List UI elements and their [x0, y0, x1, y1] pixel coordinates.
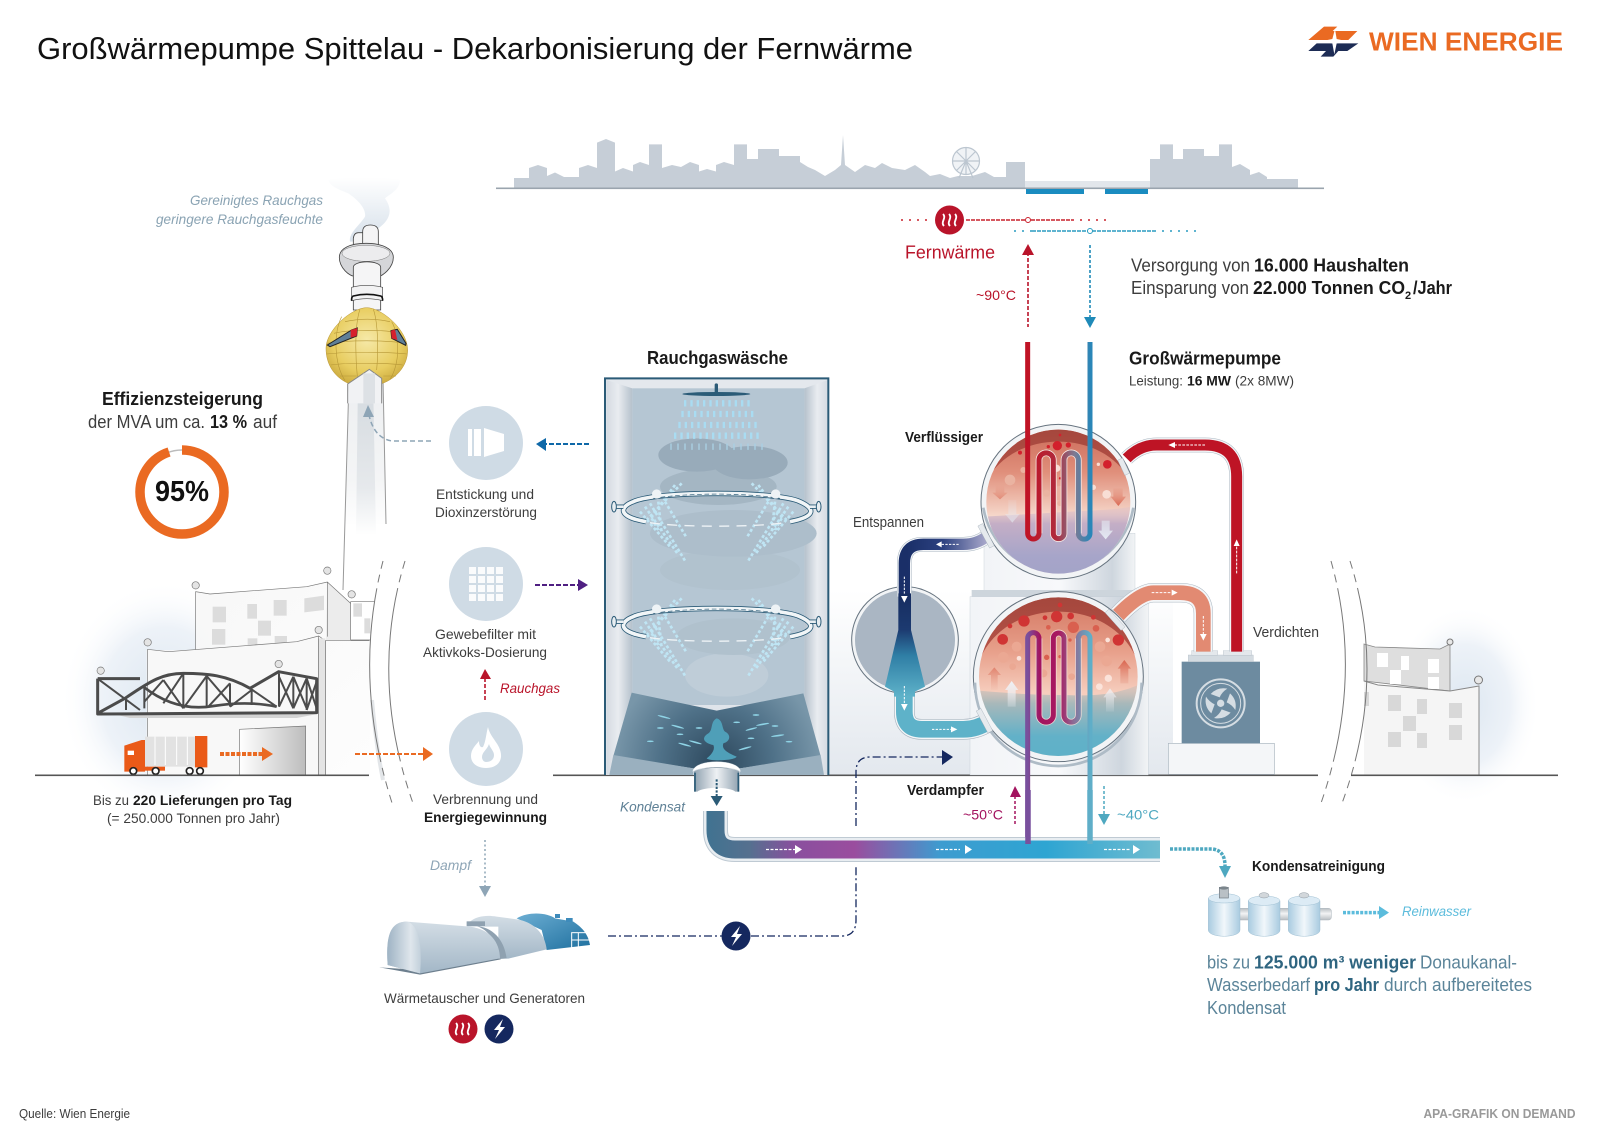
text: water savings: 125.000 m³ weniger	[1254, 952, 1416, 972]
stat: households and CO2: /Jahr	[1413, 278, 1452, 298]
clouds of flue gas	[650, 438, 817, 697]
label: 50 degrees: ~50°C	[963, 806, 1003, 822]
arrow: to condensate cleaning	[1170, 849, 1231, 878]
credit: APA-GRAFIK ON DEMAND	[1424, 1107, 1576, 1121]
heading: Fernwärme: Fernwärme	[905, 242, 995, 262]
label: Dampf: Dampf	[430, 857, 473, 873]
icon: district heat	[935, 206, 964, 234]
labels: heat pump parts: Entspannen	[853, 515, 924, 531]
text: fabric filter: Aktivkoks-Dosierung	[423, 644, 547, 660]
arrow: steam	[479, 840, 491, 897]
arrow: down from evaporator	[1098, 786, 1110, 825]
stat: households and CO2: Versorgung von	[1131, 256, 1250, 276]
Fernwärme network lines	[901, 218, 1196, 234]
panel: incineration plant building	[97, 567, 375, 775]
bridge truss	[98, 672, 317, 714]
icon: power small	[484, 1014, 514, 1044]
arrow: clean water	[1343, 906, 1389, 919]
label: Rauchgas: Rauchgas	[500, 680, 560, 696]
stat: households and CO2: 2	[1405, 290, 1411, 302]
text: denitrification: Dioxinzerstörung	[435, 504, 537, 520]
heading: Kondensatreinigung: Kondensatreinigung	[1252, 859, 1385, 875]
hopper	[609, 693, 824, 775]
title: Großwärmepumpe Spittelau - Dekarbonisierung der Fernwärme	[37, 31, 913, 66]
labels: heat pump parts	[853, 430, 1319, 799]
support blocks	[970, 533, 1148, 775]
arrow: blue from scrubber	[536, 438, 589, 451]
cut marks right	[1320, 561, 1367, 806]
text: deliveries: Bis zu	[93, 792, 129, 808]
heading: Großwärmepumpe: Leistung:	[1129, 372, 1183, 388]
drain funnel	[693, 762, 741, 806]
icon: flame	[449, 712, 523, 786]
label: cleaned flue gas: Gereinigtes Rauchgas	[190, 192, 323, 208]
text: water savings: Kondensat	[1207, 998, 1286, 1018]
text: combustion	[424, 791, 547, 825]
cut marks left	[370, 561, 414, 806]
label: cleaned flue gas	[156, 192, 323, 227]
stat: efficiency: Effizienzsteigerung	[102, 389, 263, 409]
stat: households and CO2: Einsparung von	[1131, 278, 1249, 298]
panel: chimney tower	[326, 177, 408, 590]
heading: Großwärmepumpe: 16 MW	[1187, 372, 1232, 388]
text: combustion: Energiegewinnung	[424, 809, 547, 825]
compressor	[1168, 651, 1274, 774]
arrow: up to evaporator	[1010, 786, 1021, 826]
stat: efficiency	[88, 389, 278, 432]
text: water savings: pro Jahr	[1314, 975, 1379, 995]
text: water savings: durch aufbereitetes	[1384, 975, 1532, 995]
donut chart: 95 percent	[140, 450, 224, 534]
icon: heat small	[448, 1014, 478, 1044]
stat: efficiency: 13 %	[210, 412, 247, 432]
ferris wheel	[952, 148, 980, 178]
donut chart: 95 percent: 95%	[155, 476, 209, 508]
stat: households and CO2: 22.000 Tonnen CO	[1253, 278, 1405, 298]
pipe: navy expansion	[904, 537, 987, 597]
label: Reinwasser: Reinwasser	[1402, 903, 1472, 919]
arrow: return down	[1084, 245, 1096, 328]
pipe: red hot gas	[1127, 445, 1237, 652]
arrow: into incineration	[355, 747, 433, 761]
panel: heat pump	[852, 342, 1274, 844]
arrow: grey to chimney	[363, 405, 431, 441]
text: water savings: Donaukanal-	[1420, 952, 1517, 972]
icon: heat exchanger and generators	[379, 914, 594, 975]
label: cleaned flue gas: geringere Rauchgasfeuchte	[156, 211, 323, 227]
labels: heat pump parts: Verflüssiger	[905, 430, 983, 446]
arrow: purple to scrubber	[535, 579, 588, 591]
arrow: flue gas	[480, 669, 491, 700]
pipe: salmon suction	[1118, 593, 1203, 652]
icon: filter tanks	[1208, 886, 1331, 936]
panel: Rauchgaswäsche scrubber	[605, 378, 828, 806]
arrow: power to pump	[942, 750, 953, 765]
icon: fabric filter	[449, 547, 523, 621]
shower head	[670, 385, 765, 447]
text: denitrification: Entstickung und	[436, 486, 534, 502]
stat: efficiency: der MVA um ca.	[88, 412, 205, 432]
text: water savings: bis zu	[1207, 952, 1250, 972]
text: deliveries: 220 Lieferungen pro Tag	[133, 792, 292, 808]
text: deliveries: (= 250.000 Tonnen pro Jahr)	[107, 810, 280, 826]
logo: Wien Energie: WIEN ENERGIE	[1369, 26, 1563, 56]
heading: Großwärmepumpe: Großwärmepumpe	[1129, 349, 1281, 369]
label: 40 degrees: ~40°C	[1117, 806, 1159, 822]
text: fabric filter	[423, 626, 547, 660]
condenser vessel	[978, 424, 1136, 579]
pipe: teal return	[904, 687, 988, 729]
text: combustion: Verbrennung und	[433, 791, 538, 807]
text: deliveries	[93, 792, 292, 826]
ground lines	[35, 774, 1558, 776]
stat: households and CO2	[1131, 256, 1452, 302]
heading: Großwärmepumpe: (2x 8MW)	[1235, 372, 1294, 388]
labels: heat pump parts: Verdampfer	[907, 783, 984, 799]
text: generators: Wärmetauscher und Generatoren	[384, 990, 585, 1006]
heading: Rauchgaswäsche: Rauchgaswäsche	[647, 348, 788, 368]
text: fabric filter: Gewebefilter mit	[435, 626, 536, 642]
labels: heat pump parts: Verdichten	[1253, 625, 1319, 641]
heading: Großwärmepumpe	[1129, 349, 1294, 388]
text: denitrification	[435, 486, 537, 520]
source: Quelle: Wien Energie	[19, 1107, 130, 1121]
text: water savings: Wasserbedarf	[1207, 975, 1311, 995]
icon: denitrification	[449, 406, 523, 480]
stat: efficiency: auf	[253, 412, 278, 432]
condenser coil	[1028, 342, 1090, 539]
evaporator vessel	[973, 592, 1143, 766]
skyline	[496, 135, 1324, 194]
pipe: condensate	[716, 790, 1160, 854]
stat: households and CO2: 16.000 Haushalten	[1254, 256, 1409, 276]
text: water savings	[1207, 952, 1532, 1018]
label: 90 degrees: ~90°C	[976, 287, 1016, 303]
icon: power	[722, 922, 750, 950]
arrow: truck delivery	[220, 747, 273, 761]
evaporator coil	[1028, 632, 1090, 844]
power line	[608, 757, 943, 936]
label: Kondensat: Kondensat	[620, 798, 686, 814]
nozzle	[885, 593, 925, 697]
expansion vessel	[852, 587, 958, 693]
panel: right city buildings	[1364, 639, 1482, 775]
truck	[124, 736, 207, 774]
arrow: flow up	[1022, 244, 1034, 327]
